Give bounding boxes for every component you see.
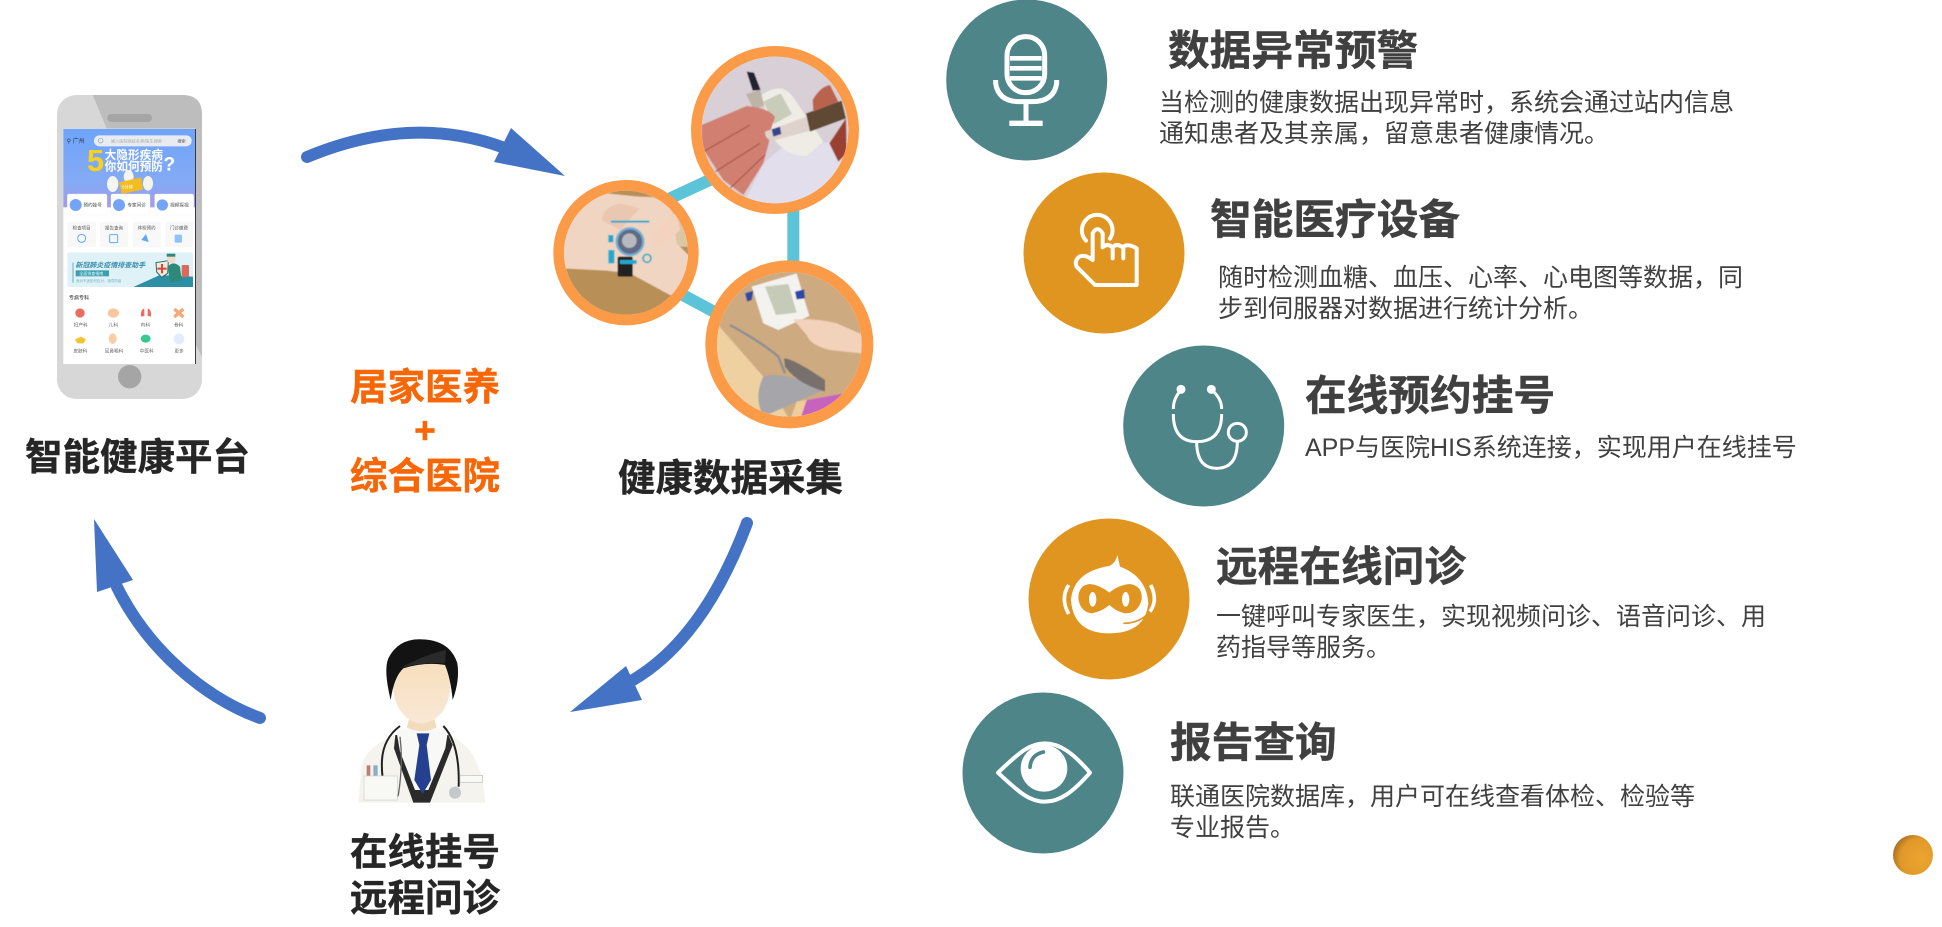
- icon circle: tap hand: [1024, 172, 1184, 334]
- phone screen: 你如何预防: [105, 160, 163, 174]
- phone screen: 检查项目: [73, 224, 91, 231]
- phone banner: 新冠肺炎疫情排查助手: [75, 261, 146, 269]
- icon circle: stethoscope: [1123, 346, 1284, 506]
- phone screen: 体检预约: [138, 224, 156, 231]
- center label: home care plus hospital: +: [414, 409, 436, 451]
- phone screen: 5: [87, 144, 104, 178]
- connector lines: [667, 177, 793, 315]
- phone screen: 视频探视: [170, 202, 189, 209]
- feature description: [1218, 264, 1743, 323]
- phone banner: 面对不适如何应对，指导防疫: [76, 278, 122, 283]
- feature heading: 数据异常预警: [1168, 27, 1418, 74]
- feature description: 联通医院数据库，用户可在线查看体检、检验等: [1170, 783, 1695, 811]
- feature description: 步到伺服器对数据进行统计分析。: [1218, 295, 1593, 323]
- phone screen: 中医科: [140, 347, 154, 354]
- phone screen: 报告查询: [105, 224, 123, 231]
- phone screen: ⚲ 广州: [67, 137, 85, 145]
- center label: home care plus hospital: 居家医养: [350, 366, 500, 408]
- feature heading: 在线预约挂号: [1305, 372, 1555, 419]
- phone screen: 皮肤科: [73, 347, 88, 354]
- feature heading: 报告查询: [1170, 719, 1337, 766]
- arrow: doctor to platform: [94, 519, 260, 718]
- phone screen: 门诊缴费: [170, 224, 188, 231]
- feature heading: 智能医疗设备: [1210, 196, 1460, 243]
- phone screen: 妇产科: [74, 322, 88, 329]
- feature description: [1170, 783, 1695, 842]
- photo: blood glucose meter: [696, 51, 854, 210]
- phone screen: 大隐形疾病: [105, 148, 163, 162]
- feature: data alert: [1159, 27, 1734, 148]
- icon circle: robot mascot: [1028, 518, 1190, 680]
- phone screen: 输入医院病症名称/医生搜索: [111, 138, 162, 144]
- feature description: 专业报告。: [1170, 814, 1295, 842]
- icon circle: eye: [962, 692, 1124, 854]
- center label: home care plus hospital: [350, 366, 500, 497]
- phone banner: 全面排查指南: [79, 270, 103, 276]
- phone screen: 更多: [174, 347, 184, 354]
- feature: online appointment: [1305, 372, 1797, 462]
- phone screen: 预约挂号: [83, 202, 102, 209]
- feature: report lookup: [1170, 719, 1695, 842]
- phone mockup: [57, 95, 202, 399]
- feature description: [1216, 603, 1766, 662]
- phone screen: 专病专科: [69, 295, 89, 302]
- heading: online registration and remote consultation: [350, 831, 500, 919]
- phone screen: 耳鼻喉科: [105, 347, 124, 354]
- doctor figure: [358, 639, 485, 803]
- heading: online registration and remote consultation: 在线挂号: [350, 831, 500, 873]
- photo: blood pressure monitor: [711, 266, 867, 422]
- heading: health data collection: 健康数据采集: [618, 457, 843, 499]
- feature description: [1159, 89, 1734, 148]
- feature heading: 远程在线问诊: [1216, 543, 1466, 590]
- arrow: platform to data collection: [307, 128, 565, 176]
- phone screen: 骨科: [174, 321, 184, 328]
- feature description: 一键呼叫专家医生，实现视频问诊、语音问诊、用: [1216, 603, 1766, 631]
- icon circle: microphone: [946, 0, 1107, 160]
- feature description: 随时检测血糖、血压、心率、心电图等数据，同: [1218, 264, 1743, 292]
- feature description: APP与医院HIS系统连接，实现用户在线挂号: [1305, 434, 1797, 462]
- decorative gold ball: [1893, 835, 1933, 875]
- phone screen: 内科: [141, 321, 150, 328]
- feature description: 通知患者及其亲属，留意患者健康情况。: [1159, 120, 1609, 148]
- photo cluster: health data devices: [559, 51, 867, 422]
- heading: smart health platform: 智能健康平台: [25, 436, 250, 478]
- feature: remote consultation: [1216, 543, 1766, 662]
- photo: smart watch on wrist: [559, 185, 693, 320]
- feature: smart medical devices: [1210, 196, 1743, 323]
- phone banner: [67, 252, 193, 287]
- phone screen: 5分钟: [122, 184, 134, 191]
- phone screen: 专家问诊: [127, 202, 146, 209]
- feature description: 药指导等服务。: [1216, 634, 1391, 662]
- phone screen: 儿科: [109, 321, 118, 328]
- feature description: 当检测的健康数据出现异常时，系统会通过站内信息: [1159, 89, 1734, 117]
- phone screen: 搜索: [177, 138, 186, 144]
- phone screen: ?: [163, 154, 175, 175]
- arrow: data collection to doctor: [570, 523, 747, 712]
- center label: home care plus hospital: 综合医院: [350, 455, 500, 497]
- heading: online registration and remote consultation: 远程问诊: [350, 877, 500, 919]
- phone screen: [63, 129, 196, 364]
